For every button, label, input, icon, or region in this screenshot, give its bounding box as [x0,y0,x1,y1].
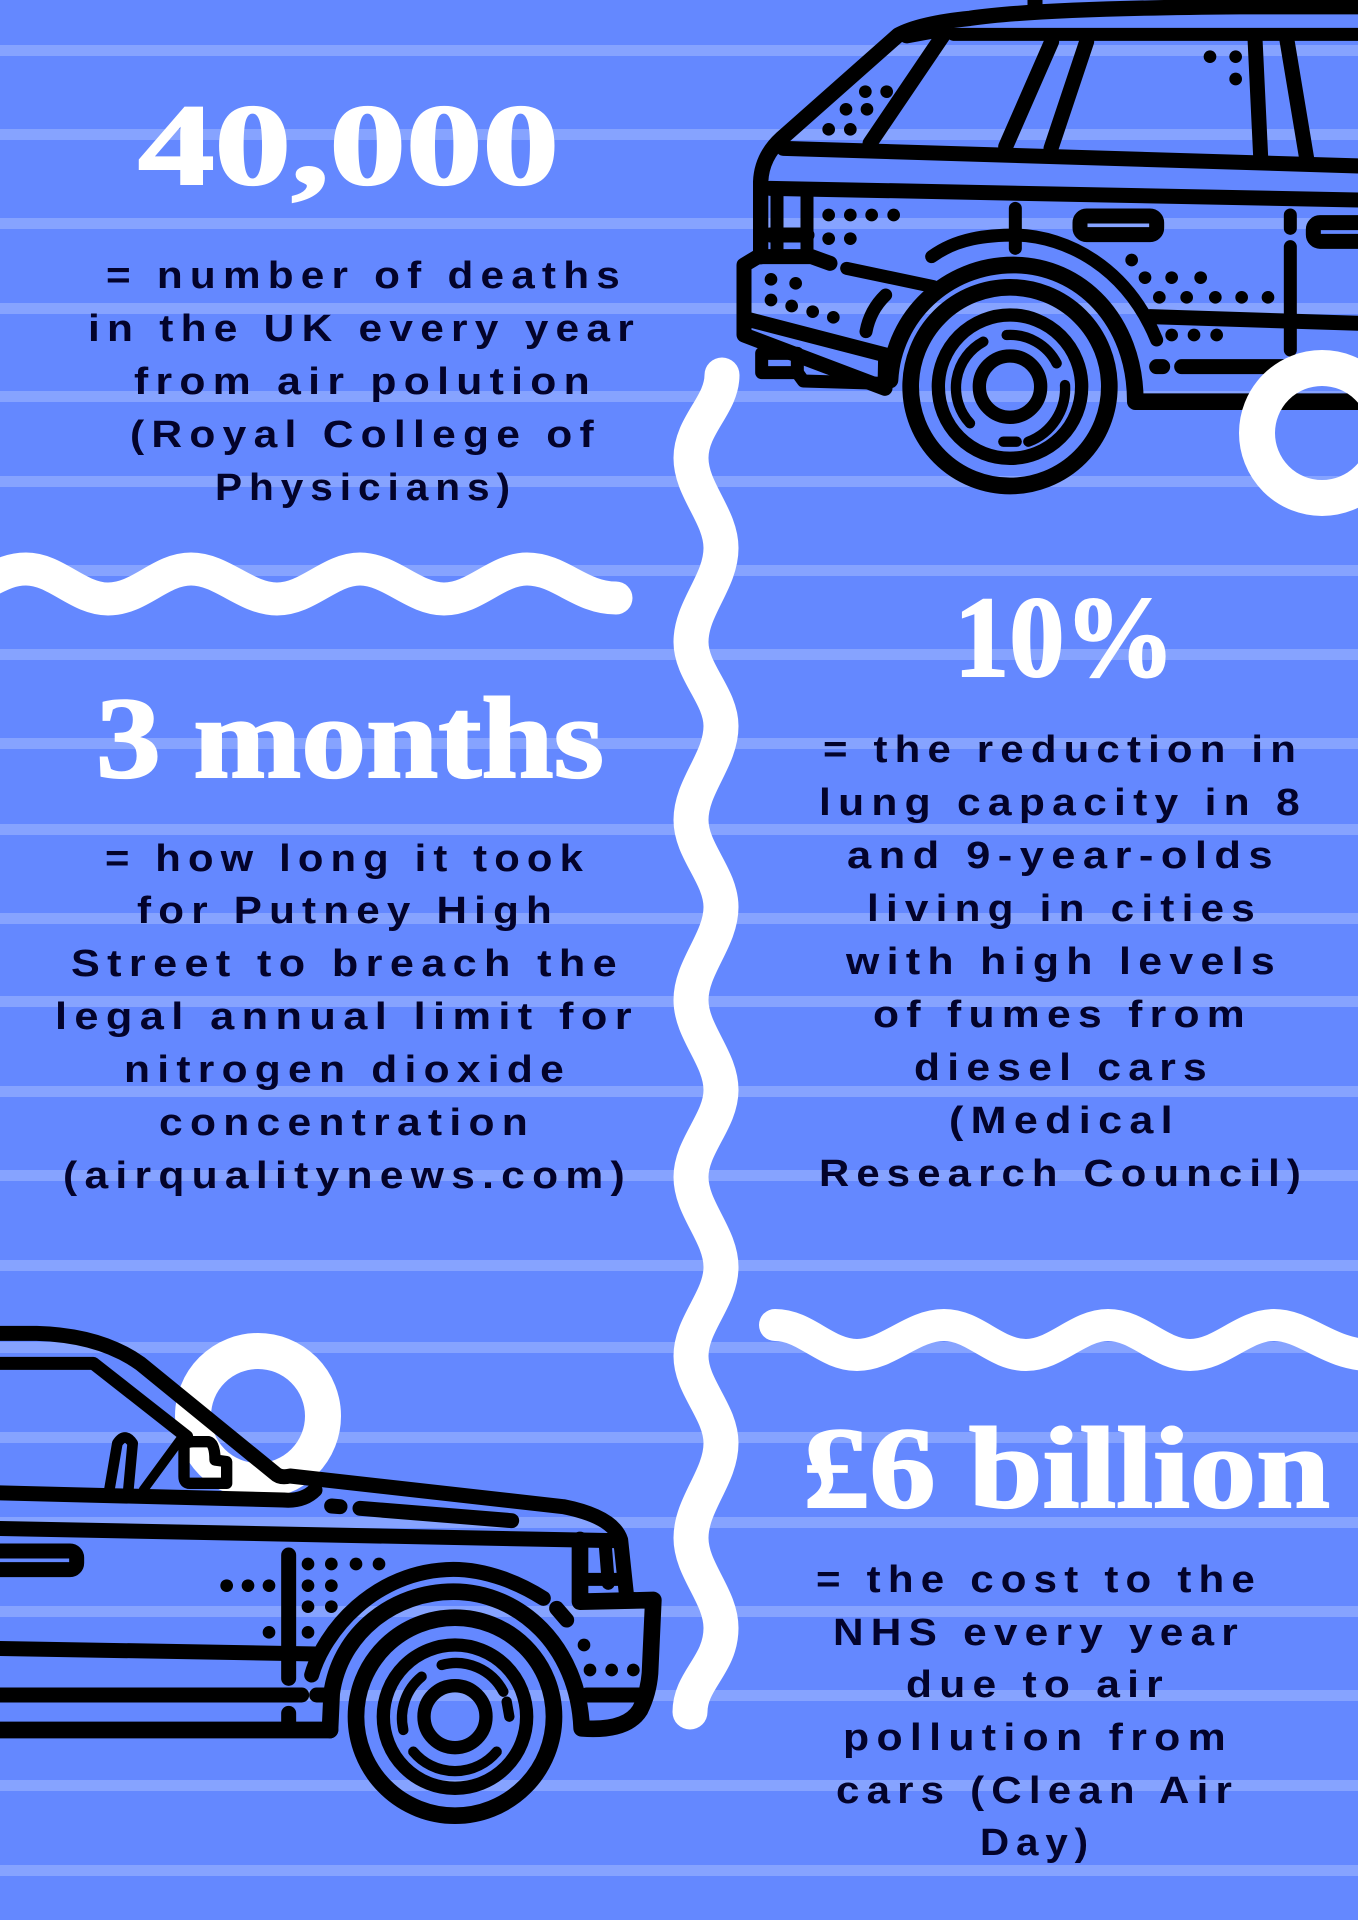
decorative ring: bottom left [193,1351,323,1481]
description: lung capacity: with high levels [845,941,1282,983]
description: deaths: in the UK every year [88,308,641,350]
description: Putney High Street: = how long it took [105,838,590,880]
description: lung capacity: diesel cars [914,1047,1214,1089]
description: lung capacity: lung capacity in 8 [819,782,1307,824]
description: lung capacity: Research Council) [819,1153,1308,1195]
heading: 3 months: 3 months [96,675,604,803]
description: Putney High Street [55,838,639,1197]
description: lung capacity: and 9-year-olds [847,835,1280,877]
description: Putney High Street: legal annual limit for [55,996,639,1038]
description: Putney High Street: for Putney High [137,890,559,932]
description: Putney High Street: nitrogen dioxide [124,1049,571,1091]
wavy divider: vertical [690,375,722,1712]
heading: 40,000: 40,000 [138,82,559,210]
wavy divider: upper left [0,569,616,599]
stat block: 10% [819,574,1308,1195]
door handle [0,1551,77,1570]
description: deaths: from air polution [134,361,597,403]
description: Putney High Street: (airqualitynews.com) [63,1155,632,1197]
description: lung capacity [819,729,1308,1195]
description: NHS cost: NHS every year [833,1612,1245,1654]
decorative ring: top right [1257,368,1358,498]
description: deaths: Physicians) [215,467,517,509]
description: lung capacity: (Medical [949,1100,1180,1142]
description: deaths [88,255,641,509]
description: NHS cost [816,1559,1262,1864]
car body outline [744,0,1358,402]
illustration: top-right car [744,0,1358,486]
description: NHS cost: due to air [906,1664,1170,1706]
description: lung capacity: of fumes from [873,994,1252,1036]
front wheel [356,1618,554,1816]
surface dots [765,50,1274,341]
stat block: 40,000 deaths [88,82,641,509]
heading: £6 billion: £6 billion [803,1405,1330,1533]
stat block: 3 months [55,675,639,1197]
illustration: bottom-left car [0,1333,653,1816]
heading: 10%: 10% [954,574,1175,702]
wavy divider: lower right [775,1325,1358,1355]
description: lung capacity: = the reduction in [823,729,1303,771]
car body outline [0,1333,653,1730]
description: Putney High Street: Street to breach the [71,943,624,985]
description: NHS cost: cars (Clean Air [836,1770,1239,1812]
description: NHS cost: = the cost to the [816,1559,1262,1601]
rear wheel [911,287,1109,486]
surface dots [220,1558,640,1676]
stat block: £6 billion [803,1405,1330,1864]
description: NHS cost: pollution from [843,1717,1233,1759]
description: deaths: = number of deaths [106,255,627,297]
description: Putney High Street: concentration [159,1102,535,1144]
description: NHS cost: Day) [980,1822,1095,1864]
description: lung capacity: living in cities [867,888,1262,930]
door handles [1080,216,1358,241]
description: deaths: (Royal College of [130,414,601,456]
